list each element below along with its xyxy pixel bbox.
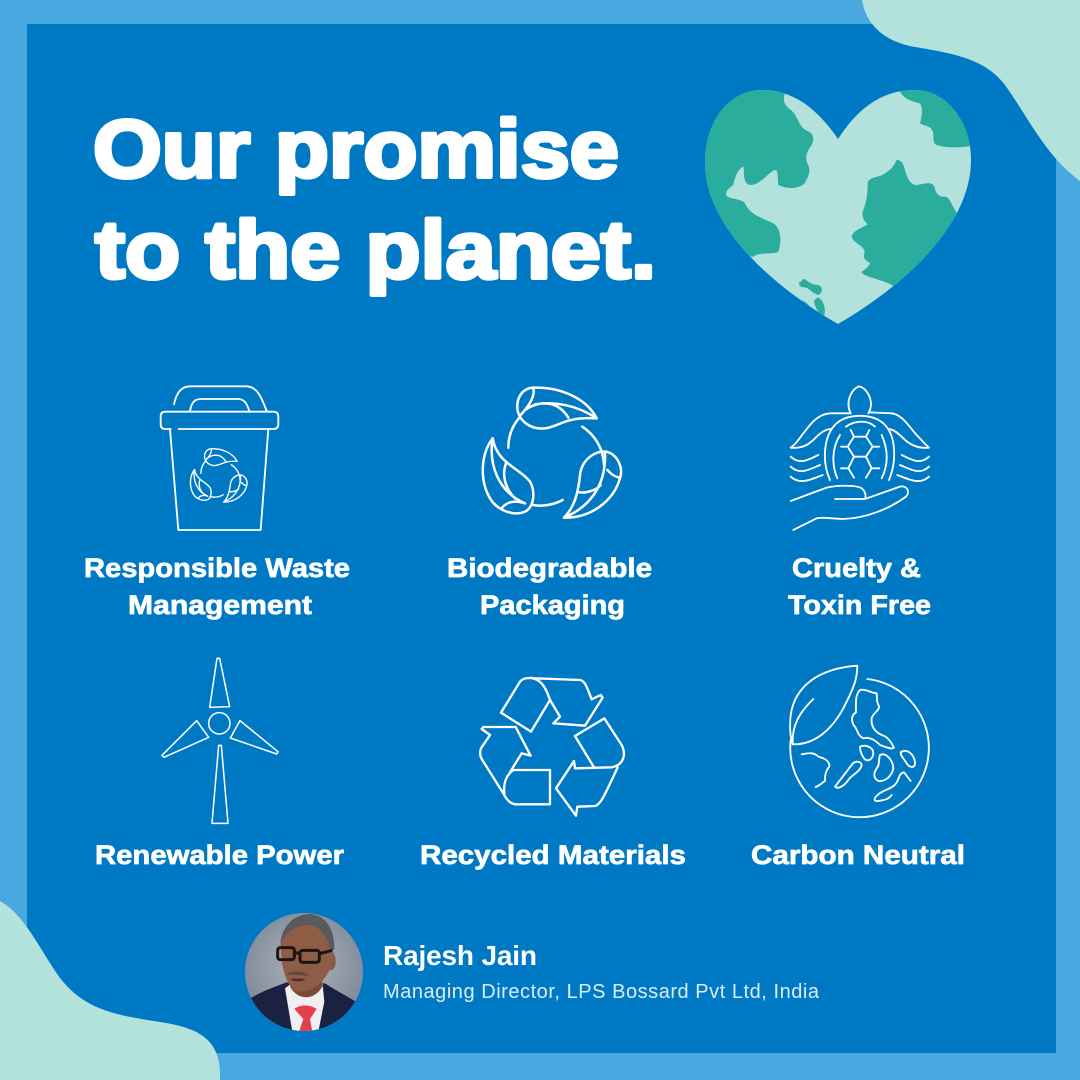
label: Biodegradable Packaging: Packaging — [480, 590, 625, 620]
hair — [281, 914, 334, 950]
title — [93, 104, 656, 296]
label: Biodegradable Packaging — [447, 553, 652, 620]
shirt — [285, 981, 324, 1032]
title: Our promise — [93, 104, 619, 195]
label: Renewable Power: Renewable Power — [95, 840, 344, 870]
icon: biodegradable leaves — [483, 388, 621, 518]
icon: heart-shaped globe — [705, 90, 971, 324]
label: Responsible Waste Management: Management — [128, 590, 312, 620]
neck — [290, 980, 322, 998]
icon: globe with leaf — [790, 666, 929, 817]
label: Recycled Materials: Recycled Materials — [420, 840, 686, 870]
label: Cruelty & Toxin Free: Cruelty & — [792, 553, 921, 583]
icon: turtle over hand — [791, 386, 929, 530]
icon: waste bin — [161, 386, 278, 530]
portrait photo — [245, 913, 363, 1038]
label: Responsible Waste Management — [84, 553, 350, 620]
face — [281, 923, 332, 992]
icon: recycling arrows — [480, 678, 624, 816]
title: to the planet. — [95, 205, 656, 296]
speaker name: Rajesh Jain — [383, 940, 537, 971]
glasses — [278, 948, 332, 962]
label: Responsible Waste Management: Responsible Waste — [84, 553, 350, 583]
speaker role: Managing Director, LPS Bossard Pvt Ltd, India — [383, 981, 820, 1003]
label: Carbon Neutral: Carbon Neutral — [751, 840, 965, 870]
decorative blob: bottom left — [0, 901, 220, 1080]
ear — [330, 952, 336, 970]
decorative blob: top right — [862, 0, 1080, 181]
suit — [251, 982, 356, 1031]
label: Biodegradable Packaging: Biodegradable — [447, 553, 652, 583]
tie — [294, 1005, 317, 1032]
label: Cruelty & Toxin Free — [788, 553, 931, 620]
mustache — [287, 971, 309, 976]
label: Cruelty & Toxin Free: Toxin Free — [788, 590, 931, 620]
icon: wind turbine — [162, 658, 278, 823]
